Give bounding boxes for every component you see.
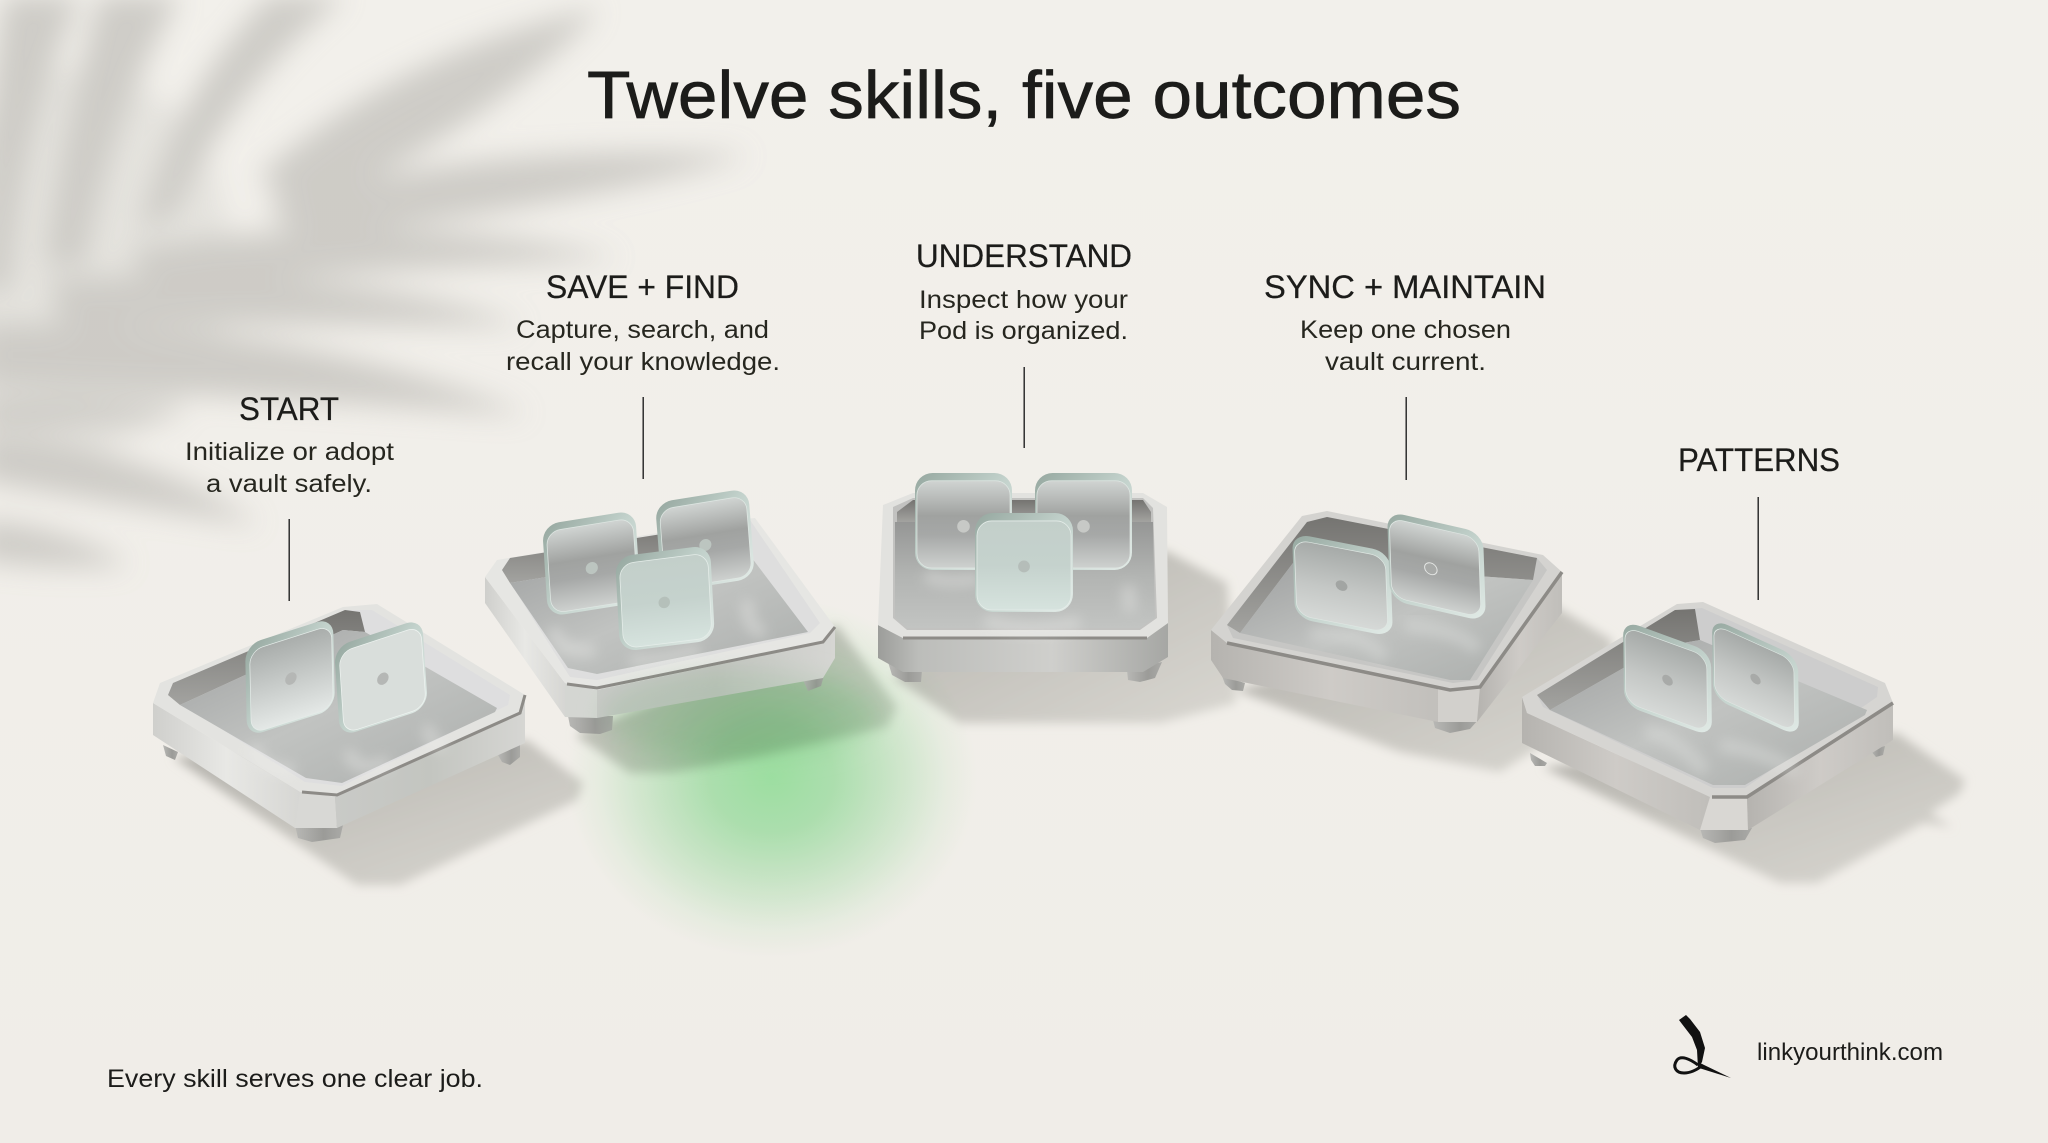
tray 4: SYNC + MAINTAIN — [1211, 511, 1562, 733]
label: SAVE + FIND — [506, 269, 780, 479]
label: SYNC + MAINTAIN: vault current. — [1325, 348, 1486, 376]
label: UNDERSTAND: Inspect how your — [919, 286, 1128, 314]
label: UNDERSTAND: UNDERSTAND — [916, 238, 1132, 274]
glass panel — [1292, 533, 1393, 637]
label: SAVE + FIND: SAVE + FIND — [546, 269, 739, 305]
label: START — [185, 391, 394, 601]
glass panel — [1387, 511, 1486, 622]
glass panel — [1035, 473, 1132, 570]
title: Twelve skills, five outcomes — [587, 58, 1461, 133]
green glow — [567, 598, 977, 958]
tray shadows — [173, 550, 1965, 885]
icon: logo mark — [1675, 1015, 1731, 1078]
glass panel — [245, 617, 335, 737]
tray 5: PATTERNS — [1522, 602, 1893, 843]
label: SYNC + MAINTAIN: SYNC + MAINTAIN — [1264, 269, 1546, 305]
glass panel — [334, 618, 428, 737]
glass panel — [615, 545, 715, 652]
footer note: Every skill serves one clear job. — [107, 1065, 483, 1093]
label: UNDERSTAND: Pod is organized. — [919, 317, 1128, 345]
website: linkyourthink.com — [1757, 1039, 1943, 1066]
label: START: a vault safely. — [206, 470, 372, 498]
glass panel — [975, 513, 1073, 612]
label: SAVE + FIND: Capture, search, and — [516, 316, 769, 344]
glass panel — [655, 488, 755, 593]
glass panel — [1712, 618, 1799, 737]
label: START: START — [239, 391, 339, 427]
tray 3: UNDERSTAND — [878, 473, 1168, 682]
glass panel — [1623, 620, 1712, 737]
label: PATTERNS: PATTERNS — [1678, 442, 1840, 478]
label: SYNC + MAINTAIN — [1264, 269, 1546, 480]
glass panel — [542, 510, 641, 617]
palm leaf shadow — [0, 0, 750, 567]
green light tint over tray 2 — [600, 670, 880, 760]
glass panel — [915, 473, 1012, 570]
label: UNDERSTAND — [916, 238, 1132, 448]
label: SYNC + MAINTAIN: Keep one chosen — [1300, 316, 1511, 344]
tray 2: SAVE + FIND — [485, 488, 835, 734]
label: START: Initialize or adopt — [185, 438, 394, 466]
label: SAVE + FIND: recall your knowledge. — [506, 348, 780, 376]
tray 1: START — [153, 604, 525, 842]
